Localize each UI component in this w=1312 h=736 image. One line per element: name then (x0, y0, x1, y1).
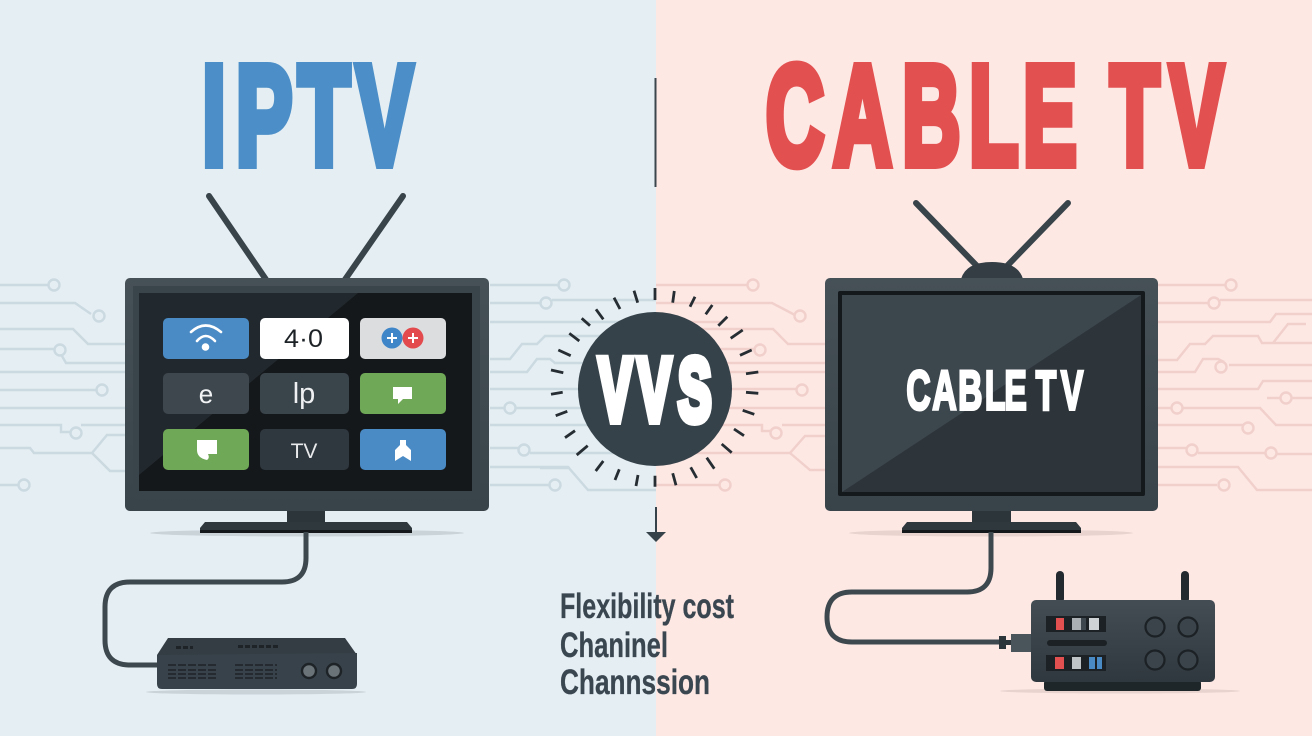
IPTV cable (105, 532, 306, 665)
title: IPTV: IPTV (202, 37, 413, 194)
app tile: Ip: lp (293, 378, 315, 410)
panel: IPTV background (0, 0, 656, 736)
stand (200, 509, 412, 533)
app tile: e (163, 373, 249, 414)
cable TV cable (827, 532, 1000, 642)
app tile: green chat (360, 373, 446, 414)
screen label: CABLE TV (906, 359, 1083, 422)
comparison text (560, 587, 734, 702)
down arrow (646, 507, 666, 542)
app tile: green note (163, 429, 249, 470)
VS label: VVS (599, 342, 711, 440)
app tile: e: e (199, 379, 213, 409)
comparison text: Channssion (560, 663, 710, 702)
port strip top (1046, 616, 1106, 632)
cable box (999, 571, 1240, 694)
antenna dome (961, 262, 1023, 279)
antennas (916, 203, 1068, 266)
stand shadow (849, 530, 1133, 536)
connector (999, 634, 1031, 652)
app tile: blue icon (360, 429, 446, 470)
center divider (654, 78, 656, 187)
stand (902, 509, 1081, 533)
app tile: 4-0: 4·0 (284, 325, 323, 353)
app tile: 4-0 (260, 318, 349, 359)
circle (578, 312, 732, 466)
app tile: wifi (163, 318, 249, 359)
panel: cable TV background (656, 0, 1312, 736)
bezel (825, 278, 1158, 511)
comparison text: Flexibility cost (560, 587, 734, 626)
app tile: TV: TV (291, 440, 317, 463)
app tile: two circles (360, 318, 446, 359)
antennas (209, 196, 403, 281)
screen (838, 291, 1145, 496)
port strip bottom (1046, 655, 1106, 671)
slot (1047, 640, 1107, 646)
IPTV set-top box (146, 638, 366, 694)
screen (139, 293, 472, 491)
stand shadow (150, 530, 464, 536)
burst ticks (551, 288, 758, 487)
VS badge (551, 288, 758, 487)
round knobs (1146, 618, 1198, 670)
cable TV television (825, 203, 1158, 536)
title: CABLE TV: CABLE TV (766, 37, 1223, 195)
bezel (125, 278, 489, 511)
IPTV television (125, 196, 489, 536)
circuit pattern: left blue (0, 280, 656, 490)
circuit pattern: right red (656, 280, 1312, 490)
comparison text: Chaninel (560, 626, 668, 665)
app tile: Ip (260, 373, 349, 414)
app tile: TV (260, 429, 349, 470)
